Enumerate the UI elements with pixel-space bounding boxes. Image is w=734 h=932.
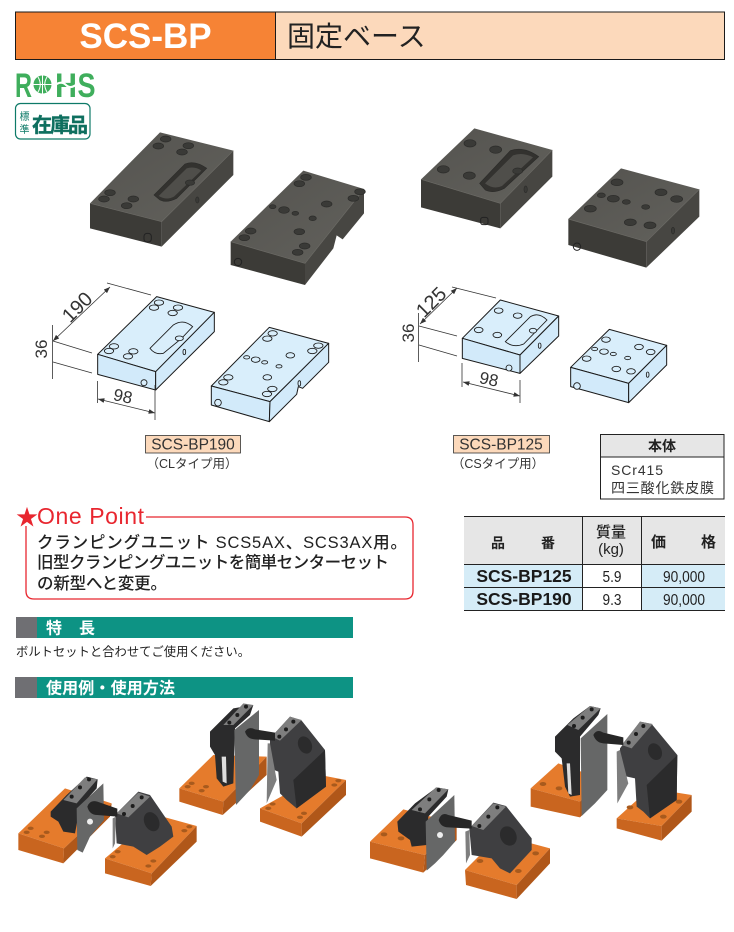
icon: RoHS logo: H <box>55 67 77 105</box>
label: SCS-BP190: （CLタイプ用） <box>147 457 237 471</box>
text: features body: ボルトセットと合わせてご使用ください。 <box>16 644 250 659</box>
spec table: (kg) <box>598 541 624 558</box>
heading: usage example <box>15 677 353 698</box>
label: SCS-BP190: SCS-BP190 <box>151 436 235 454</box>
label: SCS-BP125: （CSタイプ用） <box>452 457 544 471</box>
spec table: SCS-BP125 <box>476 566 572 586</box>
material table: SCr415 <box>611 462 663 478</box>
spec table: 価 <box>651 534 666 551</box>
dimensions: SCS-BP190: 190 <box>58 288 97 327</box>
dimensions: SCS-BP125: 36 <box>399 324 418 342</box>
callout: One Point: の新型へと変更。 <box>37 574 167 593</box>
product photo: SCS-BP190 top <box>90 132 233 247</box>
diagram: SCS-BP190 underside view <box>211 327 329 422</box>
dimensions: SCS-BP190 <box>32 283 155 420</box>
material table <box>600 434 724 499</box>
callout: One Point: クランピングユニット SCS5AX、SCS3AX用。 <box>37 533 407 552</box>
heading: usage example: 使用例・使用方法 <box>46 678 175 698</box>
icon: standard stock badge: 在庫品 <box>32 114 88 137</box>
material table: 本体 <box>648 438 676 454</box>
heading: features: 特 長 <box>46 618 95 638</box>
icon: standard stock badge: 標 <box>20 110 30 123</box>
icon: RoHS logo: S <box>78 67 96 105</box>
title banner <box>16 12 724 60</box>
usage photo: low clamp on SCS-BP125 <box>370 787 550 899</box>
spec table: SCS-BP190 <box>476 589 572 609</box>
usage photo: low clamp on SCS-BP190 <box>18 777 197 886</box>
callout: One Point: 旧型クランピングユニットを簡単センターセット <box>37 553 389 572</box>
spec table: 9.3 <box>602 592 622 609</box>
dimensions: SCS-BP190: 36 <box>32 340 51 358</box>
callout: One Point <box>16 503 413 599</box>
icon: standard stock badge: 準 <box>20 123 30 136</box>
callout: One Point: One Point <box>37 503 145 529</box>
spec table <box>464 516 725 611</box>
diagram: SCS-BP190 top view <box>98 297 214 390</box>
dimensions: SCS-BP125: 125 <box>412 283 451 322</box>
usage photo: high clamp on SCS-BP125 <box>531 706 692 841</box>
material table: 四三酸化鉄皮膜 <box>611 480 714 496</box>
spec table: 90,000 <box>663 569 705 586</box>
product photo: SCS-BP125 underside <box>568 168 699 268</box>
usage photo: high clamp on SCS-BP190 <box>179 703 346 837</box>
callout: One Point: ★ <box>16 505 38 530</box>
spec table: 5.9 <box>602 569 622 586</box>
title banner: 固定ベース <box>287 21 426 52</box>
label: SCS-BP190 <box>146 436 240 471</box>
icon: standard stock badge <box>16 104 90 139</box>
spec table: 格 <box>701 533 716 551</box>
dimensions: SCS-BP125: 98 <box>478 368 500 391</box>
spec table: 品 <box>491 535 505 551</box>
spec table: 90,000 <box>663 592 705 609</box>
diagram: SCS-BP125 top view <box>462 300 559 373</box>
label: SCS-BP125 <box>452 436 550 471</box>
dimensions: SCS-BP190: 98 <box>112 385 134 408</box>
dimensions: SCS-BP125 <box>399 283 520 403</box>
label: SCS-BP125: SCS-BP125 <box>459 436 543 454</box>
icon: RoHS logo <box>15 67 96 105</box>
heading: features <box>16 617 353 638</box>
spec table: 番 <box>541 535 555 551</box>
title banner: SCS-BP <box>79 17 212 56</box>
icon: RoHS logo: R <box>15 67 32 105</box>
product photo: SCS-BP125 top <box>421 128 552 228</box>
diagram: SCS-BP125 underside view <box>571 329 667 403</box>
spec table: 質量 <box>596 523 626 541</box>
product photo: SCS-BP190 underside <box>231 171 365 285</box>
